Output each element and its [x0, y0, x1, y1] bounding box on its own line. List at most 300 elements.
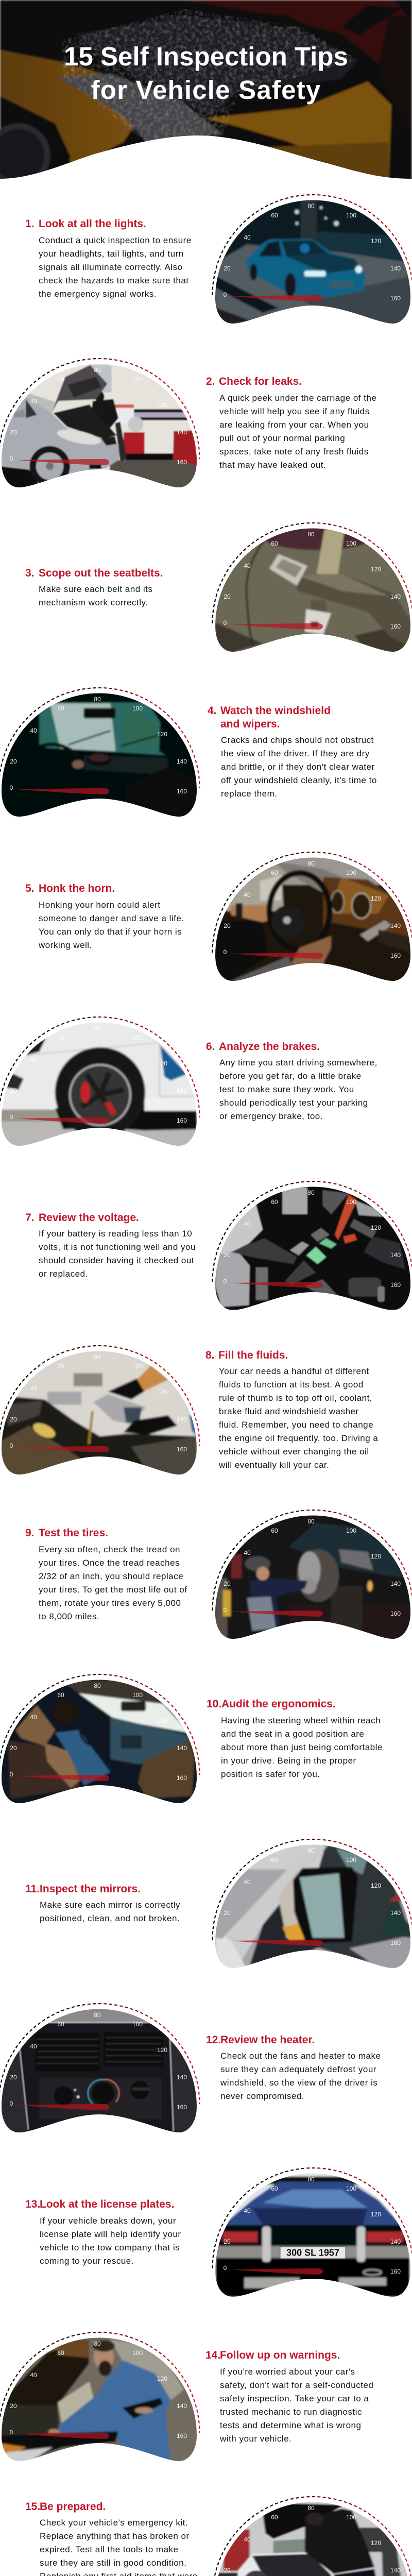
tip 10 text: position is safer for you.	[221, 1769, 320, 1779]
tip 5 text: Honking your horn could alert	[39, 900, 161, 910]
speed labels	[10, 1353, 187, 1453]
tip 4 heading: Watch the windshield	[220, 705, 331, 717]
dashed arc	[0, 359, 200, 459]
tip 13 text: coming to your rescue.	[40, 2256, 134, 2266]
speed labels: 120	[157, 1717, 167, 1724]
tip 1 heading: Look at all the lights.	[39, 218, 146, 230]
speed labels	[10, 366, 187, 466]
tip 3 text: Make sure each belt and its	[39, 584, 152, 594]
speed labels	[10, 2011, 187, 2111]
tip 8 heading: 8.	[205, 1349, 215, 1361]
tip 7	[25, 1181, 412, 1310]
speed labels: 120	[157, 401, 167, 409]
tip 13 text: If your vehicle breaks down, your	[40, 2216, 176, 2226]
tip 9 text: your tires. Once the tread reaches	[39, 1558, 180, 1568]
tip 9 text: 2/32 of an inch, you should replace	[39, 1571, 183, 1581]
tip 12 text	[220, 2049, 381, 2103]
speed labels: 120	[157, 2046, 167, 2054]
speed labels: 160	[177, 1446, 187, 1453]
speed labels: 80	[94, 2011, 101, 2019]
speed labels: 0	[10, 2429, 13, 2436]
tip 12 text: windshield, so the view of the driver is	[220, 2078, 377, 2088]
tip 8 heading: Fill the fluids.	[218, 1349, 288, 1361]
speed labels: 80	[307, 2176, 315, 2183]
dashed arc	[212, 1181, 412, 1282]
tip 4 heading	[208, 705, 331, 730]
speed labels: 20	[224, 265, 231, 272]
speed labels: 40	[30, 2043, 37, 2050]
title: for Vehicle Safety	[91, 75, 321, 105]
tip 8 text: fluid. Remember, you need to change	[219, 1420, 373, 1430]
tip 12	[0, 2003, 412, 2133]
speed labels: 100	[346, 1198, 356, 1206]
dashed arc	[212, 2168, 412, 2268]
tip 9 text	[39, 1545, 187, 1621]
photo	[0, 2008, 201, 2134]
tip 3 heading: Scope out the seatbelts.	[39, 567, 163, 579]
speed labels: 100	[132, 1363, 143, 1370]
speed labels: 160	[177, 2104, 187, 2111]
speed labels: 0	[224, 1278, 227, 1285]
photo	[0, 2334, 202, 2466]
speed labels: 20	[10, 1087, 17, 1094]
tip 12 heading: 12.	[206, 2034, 221, 2046]
dashed arc	[0, 2332, 200, 2433]
speed labels: 120	[371, 1224, 381, 1231]
tip 11 heading: Inspect the mirrors.	[40, 1883, 141, 1895]
tip 15 text: Replace anything that has broken or	[40, 2531, 190, 2541]
speed labels: 20	[224, 593, 231, 600]
tip 14 heading	[205, 2349, 360, 2362]
speed labels: 80	[307, 2504, 315, 2512]
speed labels: 60	[271, 2514, 278, 2521]
speed labels: 20	[224, 2567, 231, 2574]
speed labels: 40	[30, 2371, 37, 2379]
gauge photo 1: blue car	[212, 194, 412, 324]
tip 10 text: in your drive. Being in the proper	[221, 1756, 356, 1766]
tip 1 text: your headlights, tail lights, and turn	[39, 249, 184, 259]
tip 11	[25, 1838, 412, 1968]
dashed arc	[0, 1674, 200, 1775]
tip 4 text: the view of the driver. If they are dry	[221, 749, 370, 758]
speed labels: 120	[371, 1882, 381, 1889]
speed labels: 40	[244, 2536, 251, 2543]
tip 14 text	[220, 2365, 373, 2446]
title: 15 Self Inspection Tips	[64, 42, 348, 71]
tip 9 text: them, rotate your tires every 5,000	[39, 1598, 181, 1608]
dashed arc	[212, 852, 412, 953]
needle	[17, 2433, 109, 2439]
tip 5 text: working well.	[39, 940, 92, 950]
tip 2 text: pull out of your normal parking	[219, 433, 345, 443]
speed labels: 60	[57, 1691, 64, 1699]
speed labels: 60	[271, 1198, 278, 1206]
photo	[213, 2171, 412, 2300]
tip 3 text: mechanism work correctly.	[39, 598, 148, 607]
tip 12 text: never compromised.	[220, 2091, 304, 2101]
dashed arc	[0, 1346, 200, 1446]
speed labels: 40	[244, 1221, 251, 1228]
photo	[0, 362, 202, 490]
speed labels: 100	[346, 2185, 356, 2192]
tip 12 heading	[206, 2033, 360, 2047]
speed labels: 120	[371, 2211, 381, 2218]
speed labels: 140	[177, 758, 187, 765]
speed labels: 20	[10, 429, 17, 436]
tip 3 text	[39, 584, 152, 607]
speed labels: 60	[57, 1034, 64, 1041]
speed labels: 140	[390, 1580, 401, 1587]
needle	[17, 1446, 109, 1452]
tip 14 text: safety, don't wait for a self-conducted	[220, 2380, 373, 2390]
tip 4 text: Cracks and chips should not obstruct	[221, 735, 374, 745]
tip 14 heading: Follow up on warnings.	[220, 2349, 340, 2361]
gauge photo 4: rainy windshield	[0, 687, 200, 817]
tip 8 text: fluids to function at its best. A good	[219, 1380, 364, 1389]
gauge photo 6: white car wheel	[0, 1016, 200, 1146]
gauge photo 8: pouring oil	[0, 1345, 200, 1475]
speed labels: 100	[132, 376, 143, 383]
photo	[213, 853, 412, 985]
tip 11 heading: 11.	[25, 1883, 40, 1895]
tip 12 text: sure they can adequately defrost your	[220, 2064, 376, 2074]
speed labels: 80	[94, 1025, 101, 1032]
speed labels: 20	[10, 758, 17, 765]
tip 8 text: rule of thumb is to top off oil, coolant,	[219, 1393, 372, 1403]
speed labels: 60	[271, 1856, 278, 1863]
tip 13 text: license plate will help identify your	[40, 2229, 181, 2239]
speed labels	[224, 531, 401, 630]
speed labels: 40	[30, 1385, 37, 1392]
tip 9 text: to 8,000 miles.	[39, 1612, 99, 1621]
tip 2	[0, 358, 376, 487]
speed labels: 0	[10, 1442, 13, 1449]
speed labels: 140	[177, 2402, 187, 2410]
speed labels: 100	[132, 1034, 143, 1041]
gauge photo 5: steering wheel	[212, 851, 412, 981]
tip 9 text: your tires. To get the most life out of	[39, 1585, 187, 1595]
speed labels: 120	[157, 1388, 167, 1396]
speed labels: 140	[390, 593, 401, 600]
tip 6	[0, 1016, 377, 1146]
speed labels: 160	[390, 952, 401, 959]
speed labels: 20	[10, 1416, 17, 1423]
tip 1 text	[39, 235, 192, 299]
dashed arc	[212, 195, 412, 295]
tip 11 text: positioned, clean, and not broken.	[40, 1913, 180, 1923]
speed labels: 140	[390, 2567, 401, 2574]
tip 10 heading: 10.	[207, 1698, 221, 1710]
photo	[215, 1185, 412, 1310]
photo	[213, 524, 412, 654]
gauge photo 2: mechanic at silver car	[0, 358, 200, 487]
speed labels: 120	[371, 566, 381, 573]
speed labels: 100	[346, 212, 356, 219]
speed labels	[10, 1025, 187, 1124]
tip 5 text: someone to danger and save a life.	[39, 913, 184, 923]
tip 7 text: or replaced.	[39, 1269, 88, 1279]
tip 8 text: vehicle without ever changing the oil	[219, 1447, 369, 1456]
tip 10 text: Having the steering wheel within reach	[221, 1716, 381, 1725]
tip 15 heading: Be prepared.	[40, 2501, 106, 2513]
dashed arc	[212, 2497, 412, 2576]
tip 7 text	[39, 1229, 196, 1279]
speed labels	[224, 1518, 401, 1617]
speed labels: 60	[271, 869, 278, 876]
tip 8	[0, 1345, 378, 1475]
tip 13 heading: Look at the license plates.	[40, 2198, 174, 2210]
needle	[17, 2104, 109, 2110]
tip 8 text	[219, 1366, 378, 1470]
speed labels: 20	[10, 2402, 17, 2410]
speed labels: 160	[177, 788, 187, 795]
speed labels: 0	[224, 948, 227, 956]
photo	[213, 2501, 412, 2576]
tip 3	[25, 522, 412, 652]
tip 5 heading: 5.	[25, 883, 35, 894]
speed labels: 80	[307, 531, 315, 538]
speed labels	[10, 2340, 187, 2439]
speed labels: 160	[177, 459, 187, 466]
speed labels: 60	[271, 2185, 278, 2192]
speed labels: 0	[10, 1113, 13, 1121]
license plate: 300 SL 1957	[286, 2247, 339, 2258]
speed labels: 120	[157, 731, 167, 738]
speed labels: 40	[244, 1878, 251, 1886]
speed labels: 40	[30, 398, 37, 405]
speed labels: 20	[10, 1744, 17, 1752]
tip 6 heading: Analyze the brakes.	[219, 1041, 320, 1053]
speed labels: 100	[132, 705, 143, 712]
speed labels: 20	[224, 2238, 231, 2245]
speed labels: 100	[132, 2349, 143, 2357]
speed labels: 140	[390, 922, 401, 929]
speed labels	[224, 202, 401, 302]
tip 14 text: trusted mechanic to run diagnostic	[220, 2407, 362, 2417]
tip 6 text: before you get far, do a little brake	[219, 1071, 362, 1081]
photo	[213, 1513, 412, 1641]
tip 15	[0, 2496, 412, 2576]
speed labels: 40	[244, 234, 251, 241]
tip 15 text	[40, 2516, 203, 2576]
speed labels: 0	[224, 1606, 227, 1614]
tip 3 heading: 3.	[25, 567, 35, 579]
tip 2 text: vehicle will help you see if any fluids	[219, 406, 370, 416]
tip 2 text: A quick peek under the carriage of the	[219, 393, 376, 403]
speed labels: 140	[177, 1087, 187, 1094]
tip 14 text: safety inspection. Take your car to a	[220, 2394, 369, 2403]
speed labels: 20	[224, 1580, 231, 1587]
tip 5 text: You can only do that if your horn is	[39, 927, 182, 937]
speed labels: 120	[157, 1060, 167, 1067]
gauge photo 9: mechanic with tire	[212, 1510, 412, 1639]
header photo: car engine	[0, 0, 412, 179]
title	[64, 42, 348, 105]
tip 1 text: Conduct a quick inspection to ensure	[39, 235, 192, 245]
photo	[0, 1019, 202, 1150]
gauge photo 15: mechanic at white VW	[215, 2502, 410, 2576]
tip 13	[0, 2167, 412, 2298]
tip 10 text: and the seat in a good position are	[221, 1729, 364, 1739]
tip 14 heading: 14.	[205, 2349, 220, 2361]
speed labels: 160	[390, 623, 401, 630]
tip 11 heading	[25, 1883, 180, 1896]
speed labels: 160	[390, 295, 401, 302]
tip 4 text: off your windshield cleanly, it's time to	[221, 775, 377, 785]
speed labels: 160	[390, 2268, 401, 2275]
speed labels: 0	[10, 784, 13, 791]
needle	[231, 295, 323, 301]
tip 12 heading: Review the heater.	[220, 2034, 315, 2046]
speed labels: 80	[307, 1518, 315, 1525]
gauge photo 11: side mirror	[215, 1844, 410, 1968]
tip 8 text: will eventually kill your car.	[219, 1460, 329, 1470]
speed labels: 140	[390, 1251, 401, 1259]
tip 1 text: signals all illuminate correctly. Also	[39, 262, 182, 272]
tip 7 text: should consider having it checked out	[39, 1256, 194, 1265]
speed labels: 40	[244, 562, 251, 569]
tip 6 text: should periodically test your parking	[219, 1098, 368, 1108]
speed labels: 120	[371, 238, 381, 245]
tip 15 text: expired. Test all the tools to make	[40, 2545, 178, 2554]
needle	[231, 953, 323, 959]
needle	[17, 1775, 109, 1781]
needle	[17, 1117, 109, 1124]
photo	[0, 1677, 202, 1806]
header white wave	[0, 135, 412, 180]
tip 2 heading: Check for leaks.	[219, 376, 302, 387]
tip 9 heading: 9.	[25, 1527, 35, 1539]
tip 14	[0, 2331, 412, 2462]
tip 4 text	[221, 735, 377, 799]
tip 9 text: Every so often, check the tread on	[39, 1545, 180, 1554]
tip 4 text: replace them.	[221, 789, 277, 799]
photo	[0, 691, 202, 820]
speed labels: 80	[94, 2340, 101, 2347]
tip 11 text	[40, 1899, 180, 1925]
speed labels: 100	[346, 540, 356, 547]
gauge photo 13: classic car rear	[215, 2173, 410, 2297]
speed labels: 0	[224, 619, 227, 626]
speed labels	[10, 696, 187, 795]
needle	[17, 459, 109, 465]
tip 5 heading: Honk the horn.	[39, 883, 115, 894]
speed labels: 160	[177, 2432, 187, 2439]
needle	[17, 788, 109, 794]
tip 2 text: spaces, take note of any fresh fluids	[219, 447, 369, 456]
speed labels: 60	[271, 212, 278, 219]
speed labels: 40	[30, 1714, 37, 1721]
tip 12 text: Check out the fans and heater to make	[220, 2051, 381, 2061]
tip 1	[25, 194, 412, 324]
speed labels: 160	[177, 1774, 187, 1782]
tip 4	[0, 687, 377, 817]
tip 10 text	[221, 1716, 383, 1779]
tip 10	[0, 1673, 383, 1803]
tip 9	[25, 1510, 412, 1639]
speed labels: 0	[10, 2100, 13, 2107]
needle	[231, 1611, 323, 1617]
tip 4 heading: 4.	[208, 705, 217, 717]
needle	[231, 1282, 323, 1288]
speed labels: 0	[224, 2264, 227, 2272]
tip 13 heading: 13.	[25, 2198, 40, 2210]
tip 4 heading: and wipers.	[220, 718, 280, 730]
speed labels: 0	[224, 1936, 227, 1943]
tip 14 text: If you're worried about your car's	[220, 2367, 355, 2377]
speed labels: 120	[371, 895, 381, 902]
tip 8 text: Your car needs a handful of different	[219, 1366, 369, 1376]
needle	[231, 2268, 323, 2275]
tip 7 text: If your battery is reading less than 10	[39, 1229, 192, 1239]
speed labels: 60	[57, 376, 64, 383]
tip 7 text: volts, it is not functioning well and you	[39, 1242, 196, 1252]
speed labels: 20	[10, 2074, 17, 2081]
tip 15 text: Check your vehicle's emergency kit.	[40, 2518, 188, 2528]
speed labels: 80	[307, 860, 315, 867]
speed labels: 140	[390, 1909, 401, 1917]
tip 6 text: Any time you start driving somewhere,	[219, 1058, 377, 1067]
speed labels: 100	[346, 869, 356, 876]
speed labels: 40	[30, 727, 37, 734]
speed labels: 40	[244, 1549, 251, 1556]
tip 6 text	[219, 1058, 377, 1121]
speed labels: 140	[390, 2238, 401, 2245]
gauge photo 10: driver interior	[0, 1673, 200, 1803]
speed labels: 160	[390, 1281, 401, 1289]
tip 10 heading: Audit the ergonomics.	[221, 1698, 336, 1710]
speed labels	[224, 2176, 401, 2275]
needle	[231, 623, 323, 630]
speed labels: 100	[346, 2514, 356, 2521]
speed labels: 20	[224, 1251, 231, 1259]
tip 6 heading: 6.	[206, 1041, 215, 1053]
speed labels	[224, 1189, 401, 1289]
speed labels: 40	[30, 1056, 37, 1063]
speed labels	[224, 2504, 401, 2576]
speed labels: 80	[94, 696, 101, 703]
tip 15 heading: 15.	[25, 2501, 40, 2513]
speed labels: 60	[57, 2021, 64, 2028]
dashed arc	[212, 1839, 412, 1940]
tip 1 text: the emergency signal works.	[39, 289, 157, 299]
tip 14 text: tests and determine what is wrong	[220, 2420, 361, 2430]
speed labels: 0	[224, 291, 227, 298]
speed labels: 120	[157, 2375, 167, 2382]
tip 15 heading	[25, 2500, 180, 2514]
speed labels: 80	[307, 1847, 315, 1854]
speed labels: 140	[177, 2074, 187, 2081]
tip 15 text: sure they are still in good condition.	[40, 2558, 186, 2568]
tip 2 text	[219, 393, 376, 470]
speed labels: 80	[307, 1189, 315, 1196]
tip 9 heading: Test the tires.	[39, 1527, 108, 1539]
speed labels: 100	[132, 1691, 143, 1699]
needle	[231, 1940, 323, 1946]
photo	[215, 200, 410, 324]
speed labels: 40	[244, 2207, 251, 2214]
tip 5 text	[39, 900, 184, 950]
speed labels: 160	[390, 1939, 401, 1946]
tip 6 text: or emergency brake, too.	[219, 1111, 323, 1121]
gauge photo 14: mechanic in blue	[2, 2337, 197, 2461]
speed labels: 100	[346, 1527, 356, 1534]
speed labels: 100	[132, 2021, 143, 2028]
speed labels: 80	[94, 366, 101, 374]
speed labels: 100	[346, 1856, 356, 1863]
tip 7 heading: Review the voltage.	[39, 1212, 139, 1224]
speed labels: 120	[371, 2539, 381, 2547]
